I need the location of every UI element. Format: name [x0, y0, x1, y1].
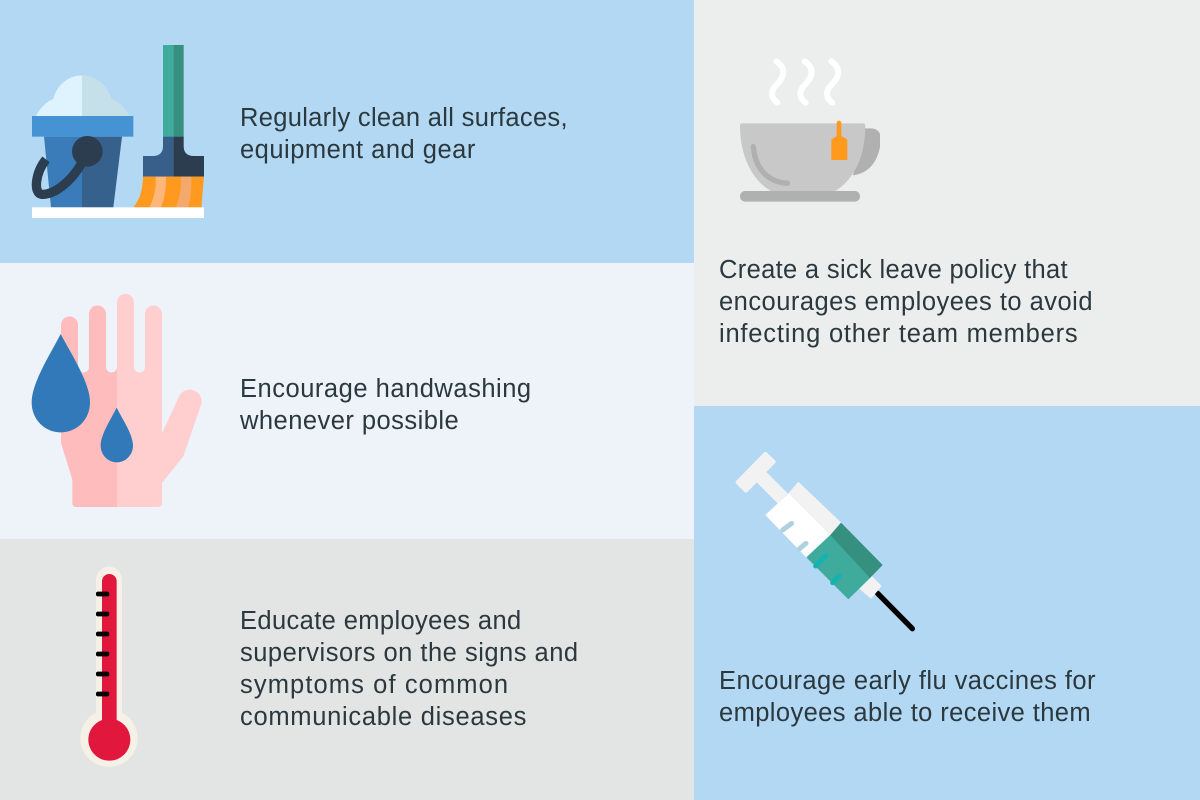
- text: educate employees: [240, 607, 579, 731]
- text: handwashing: Encourage handwashing: [240, 375, 532, 403]
- icon: bucket and mop: [32, 45, 204, 218]
- text: educate employees: supervisors on the signs and: [240, 639, 579, 667]
- text: sick leave policy: Create a sick leave policy that: [719, 256, 1068, 284]
- icon: thermometer: [80, 566, 138, 767]
- text: flu vaccines: Encourage early flu vaccines for: [719, 667, 1096, 695]
- text: handwashing: [240, 375, 532, 435]
- text: educate employees: Educate employees and: [240, 607, 522, 635]
- icon: hand with water drops: [32, 294, 202, 507]
- icon: syringe: [736, 452, 915, 632]
- panel: handwashing: [0, 263, 694, 539]
- text: handwashing: whenever possible: [240, 407, 459, 435]
- icon: tea cup: [740, 58, 880, 202]
- text: clean surfaces: equipment and gear: [240, 136, 476, 164]
- text: flu vaccines: employees able to receive them: [719, 699, 1091, 727]
- text: educate employees: communicable diseases: [240, 703, 527, 731]
- text: sick leave policy: [719, 256, 1093, 348]
- text: educate employees: symptoms of common: [240, 671, 509, 699]
- text: sick leave policy: infecting other team members: [719, 320, 1078, 348]
- panel: sick leave policy: [694, 0, 1200, 406]
- panel: clean surfaces: [0, 0, 694, 263]
- text: sick leave policy: encourages employees to avoid: [719, 288, 1093, 316]
- text: clean surfaces: Regularly clean all surfaces,: [240, 104, 568, 132]
- text: flu vaccines: [719, 667, 1096, 727]
- panel: educate employees: [0, 539, 694, 800]
- text: clean surfaces: [240, 104, 568, 164]
- panel: flu vaccines: [694, 406, 1200, 800]
